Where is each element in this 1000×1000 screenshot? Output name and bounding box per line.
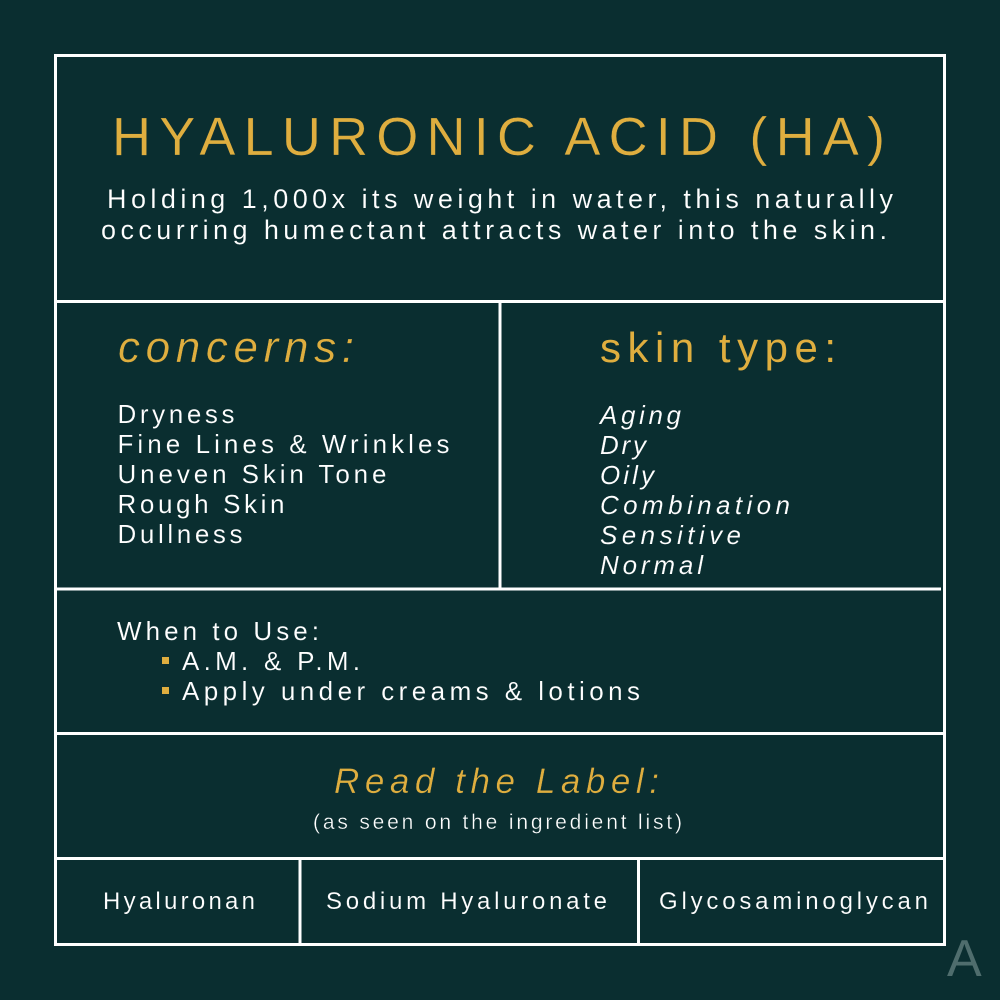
description text	[101, 184, 893, 245]
concerns list	[118, 399, 450, 549]
heading: read the label: Read the Label:	[334, 762, 659, 801]
heading: skin type: skin type:	[600, 324, 836, 371]
bullet: apply under creams: Apply under creams & lotions	[182, 676, 640, 706]
cell: Sodium Hyaluronate	[300, 858, 638, 945]
cell: Hyaluronan: Hyaluronan	[103, 888, 255, 915]
skin type list: Oily	[600, 460, 656, 490]
panel: when to use	[55, 589, 944, 734]
title: HYALURONIC ACID (HA)	[112, 107, 885, 167]
concerns list: Dryness	[118, 399, 234, 429]
cell: Glycosaminoglycan: Glycosaminoglycan	[659, 888, 928, 915]
concerns list: Fine Lines & Wrinkles	[118, 429, 450, 459]
panel: header	[55, 56, 945, 302]
panel: concerns	[56, 302, 500, 589]
heading: concerns: concerns:	[118, 323, 354, 372]
outer frame	[56, 56, 944, 944]
cell: Hyaluronan	[56, 858, 300, 945]
description text: Holding 1,000x its weight in water, this naturally	[107, 184, 893, 214]
skin type list: Dry	[600, 430, 648, 460]
skin type list: Normal	[600, 550, 704, 580]
description text: occurring humectant attracts water into the skin.	[101, 215, 887, 245]
cell: Glycosaminoglycan	[638, 858, 944, 944]
concerns list: Rough Skin	[118, 489, 284, 519]
skin type list: Combination	[600, 490, 790, 520]
skin type list: Aging	[598, 400, 682, 430]
concerns list: Uneven Skin Tone	[118, 459, 386, 489]
skin type list: Sensitive	[600, 520, 741, 550]
panel: read the label	[55, 734, 945, 858]
skin type list	[598, 400, 790, 580]
panel: skin type	[500, 302, 944, 589]
bullet: A.M. and P.M.: A.M. & P.M.	[182, 646, 360, 676]
note: ingredient list: (as seen on the ingredient list)	[313, 811, 682, 834]
cell: Sodium Hyaluronate: Sodium Hyaluronate	[326, 888, 607, 915]
concerns list: Dullness	[118, 519, 242, 549]
logo mark: A	[947, 930, 982, 988]
heading: when to use: When to Use:	[117, 616, 319, 646]
